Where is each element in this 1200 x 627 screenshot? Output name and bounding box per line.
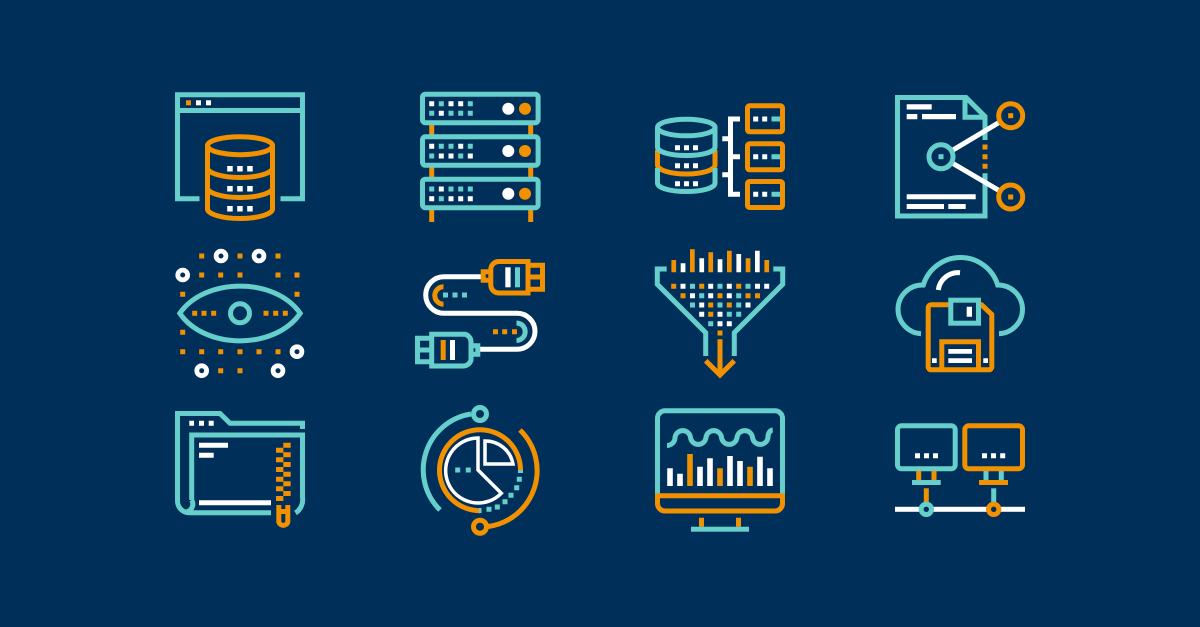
icon: data funnel	[657, 249, 783, 375]
icon: zip folder	[178, 414, 303, 525]
icon: shared document	[898, 98, 1023, 216]
icon: database tree	[658, 106, 782, 208]
icon: usb cable	[418, 262, 542, 366]
icon: pie chart cycle	[423, 408, 537, 533]
icon: browser window with database	[178, 95, 302, 218]
icon: eye with data points	[178, 251, 302, 376]
icon: cloud with floppy disk	[898, 257, 1022, 370]
icon: network of two computers	[895, 426, 1025, 514]
icon: monitor with charts	[658, 411, 782, 532]
icon: server rack	[422, 94, 538, 222]
